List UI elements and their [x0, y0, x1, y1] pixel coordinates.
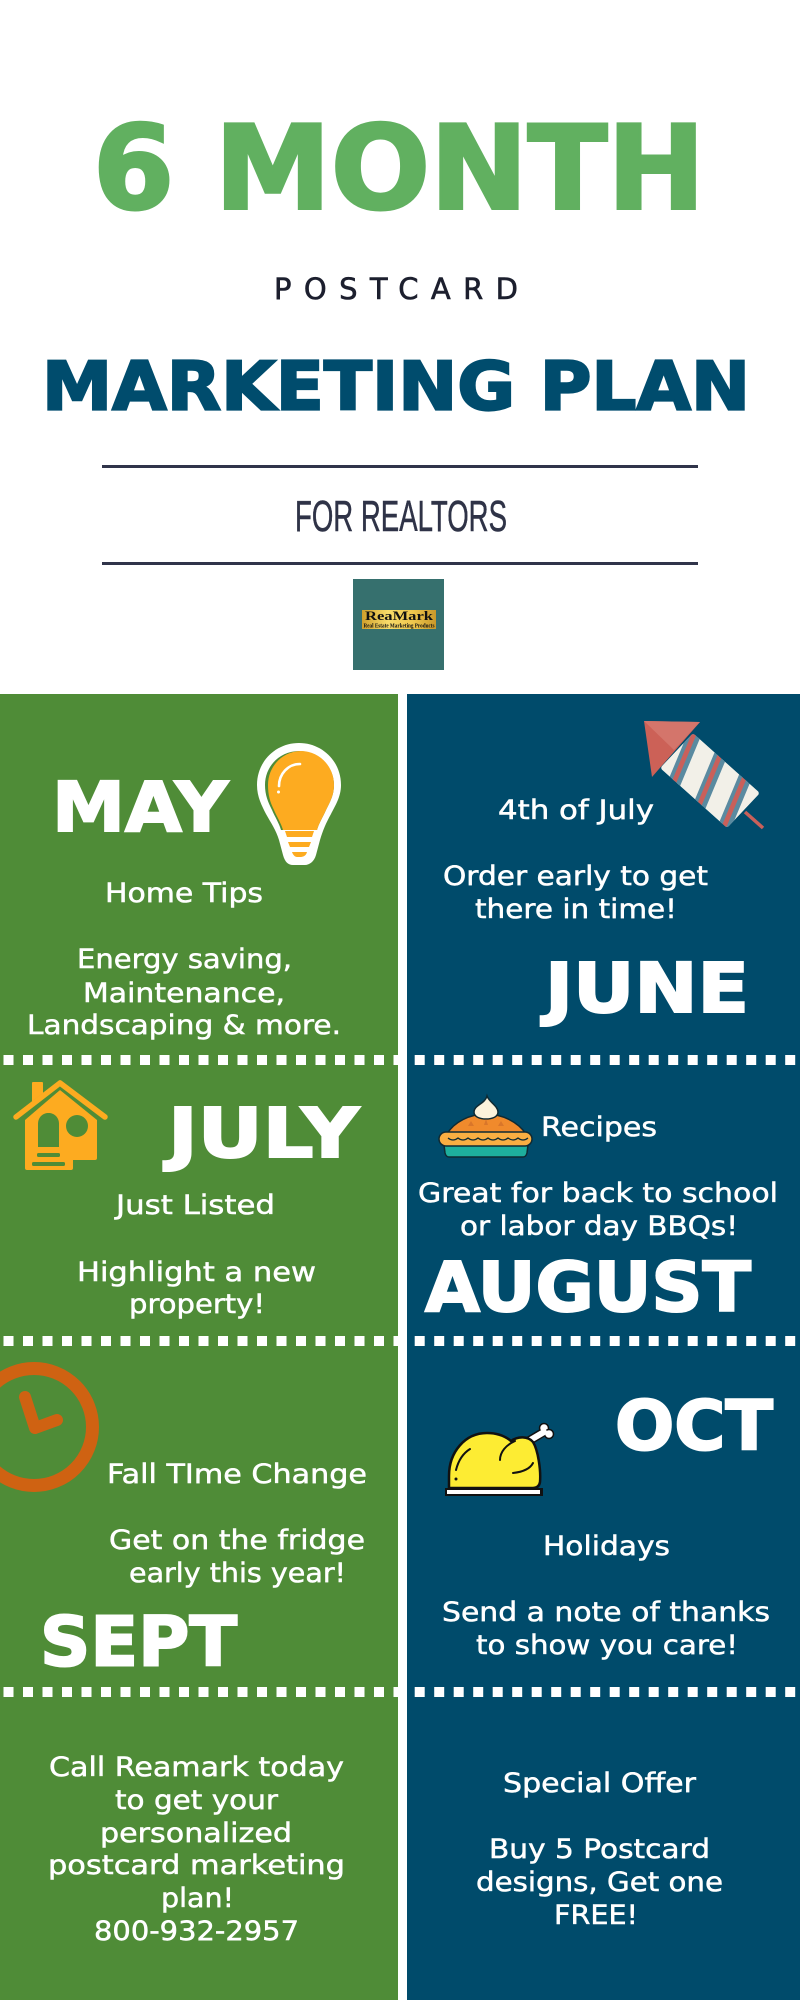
text: Order early [443, 861, 708, 925]
icon: pie [439, 1096, 532, 1157]
heading: FOR REALTORS: FOR REALTORS [295, 492, 507, 541]
icon: light bulb [257, 743, 341, 865]
text: Get on the fridge [109, 1525, 365, 1589]
text: Buy 5 Postcard offer: FREE! [554, 1900, 638, 1931]
panel: July [0, 1055, 398, 1336]
subtitle: POSTCARD: POSTCARD [274, 272, 518, 306]
icon: turkey [445, 1424, 554, 1496]
text: 4th of July: 4th of July [498, 795, 654, 826]
panel: May [0, 694, 398, 1055]
text: call to action: 800-932-2957 [94, 1916, 299, 1947]
text: Order early: Order early to get [443, 861, 708, 892]
text: Great for back to school: or labor day BBQs! [460, 1211, 738, 1242]
icon: firework rocket [644, 721, 763, 831]
icon: clock [0, 1368, 92, 1486]
text: Buy 5 Postcard offer: Buy 5 Postcard [489, 1834, 710, 1865]
text: Great for back to school [418, 1178, 778, 1242]
logo: ReaMark [353, 579, 444, 670]
text: Special Offer: Special Offer [503, 1768, 697, 1799]
text: Energy saving [27, 944, 341, 1041]
month: SEPT: SEPT [40, 1602, 237, 1682]
text: Highlight a new property: property! [129, 1289, 265, 1320]
month: JULY: JULY [163, 1094, 360, 1174]
text: Send a note of thanks: to show you care! [476, 1630, 738, 1661]
panel: October [407, 1336, 800, 1687]
month: OCT: OCT [615, 1386, 773, 1466]
text: call to action: personalized [100, 1818, 292, 1849]
text: Buy 5 Postcard offer: designs, Get one [476, 1867, 723, 1898]
text: Get on the fridge: Get on the fridge [109, 1525, 365, 1556]
month: JUNE: JUNE [541, 949, 749, 1029]
text: Highlight a new property [77, 1257, 316, 1320]
text: Just Listed: Just Listed [114, 1190, 275, 1221]
text: Order early: there in time! [475, 894, 677, 925]
text: call to action: to get your [115, 1785, 279, 1816]
text: call to action [48, 1752, 345, 1947]
panel: September [0, 1336, 398, 1687]
text: Energy saving: Maintenance, [83, 978, 285, 1009]
text: Get on the fridge: early this year! [129, 1558, 346, 1589]
panel: June [407, 694, 800, 1055]
panel: August [407, 1055, 800, 1336]
text: call to action: plan! [161, 1883, 234, 1914]
text: Great for back to school: Great for back to school [418, 1178, 778, 1209]
logo: ReaMark: Real Estate Marketing Products [364, 624, 435, 630]
text: Recipes: Recipes [541, 1112, 657, 1143]
heading: MARKETING PLAN: MARKETING PLAN [42, 348, 750, 426]
text: Fall TIme Change: Fall TIme Change [107, 1459, 367, 1490]
month: MAY: MAY [52, 768, 229, 848]
text: Send a note of thanks: Send a note of thanks [442, 1597, 770, 1628]
text: Energy saving: Landscaping & more. [27, 1010, 341, 1041]
text: call to action: postcard marketing [48, 1850, 345, 1881]
logo: ReaMark: ReaMark [365, 609, 433, 623]
month: AUGUST: AUGUST [425, 1248, 751, 1328]
panel: Special Offer [407, 1687, 800, 2000]
text: Energy saving: Energy saving, [77, 944, 292, 975]
text: Home Tips: Home Tips [105, 878, 263, 909]
title: 6 MONTH: 6 MONTH [93, 102, 705, 236]
panel: Call Reamark [0, 1687, 398, 2000]
text: Holidays: Holidays [543, 1531, 670, 1562]
icon: house [13, 1082, 110, 1170]
text: Send a note of thanks [442, 1597, 770, 1661]
text: Buy 5 Postcard offer [476, 1834, 723, 1931]
text: Highlight a new property: Highlight a new [77, 1257, 316, 1288]
text: call to action: Call Reamark today [49, 1752, 344, 1783]
